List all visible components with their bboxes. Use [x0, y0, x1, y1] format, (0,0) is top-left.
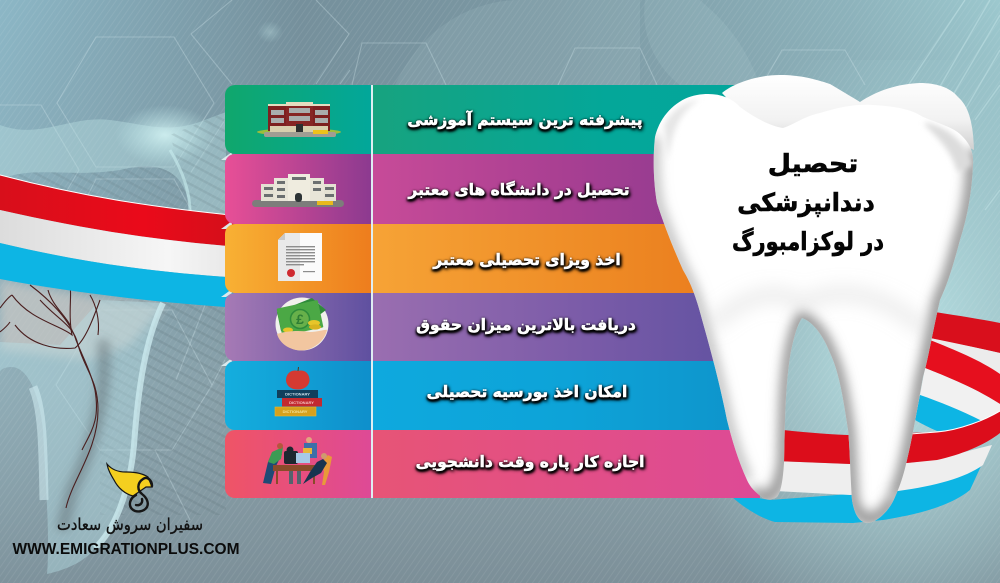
panel: reputable universities row [225, 154, 664, 224]
panel: student visa row [225, 224, 694, 293]
text: row 1 label: پیشرفته ترین سیستم آموزشی [407, 111, 643, 129]
small notch marks between rows [221, 152, 232, 366]
large translucent background curves [395, 0, 760, 85]
icon: apple on dictionaries [275, 367, 322, 416]
title on tooth: دندانپزشکی [737, 188, 875, 217]
text: row 5 label: امکان اخذ بورسیه تحصیلی [427, 383, 627, 401]
text: row 4 label: دریافت بالاترین میزان حقوق [416, 316, 636, 334]
right ribbon front band [725, 411, 1000, 523]
nerves [0, 285, 100, 508]
right ribbon back band [915, 312, 1000, 431]
text: website address: WWW.EMIGRATIONPLUS.COM [12, 541, 240, 558]
left ribbon [0, 175, 240, 308]
icon: students around a table [263, 437, 332, 485]
title on tooth: در لوکزامبورگ [732, 227, 884, 256]
soft outer shading, strongest on the right side and roots [654, 137, 747, 480]
pale glow beneath ribbon [0, 280, 165, 360]
hexagon outlines [0, 0, 865, 520]
tooth illustration [654, 75, 974, 523]
title on tooth [732, 149, 884, 256]
light streaks top right [905, 0, 1000, 210]
icon: golden wing [107, 464, 152, 496]
icon: white university building [252, 174, 344, 207]
tooth body [654, 94, 973, 523]
text: row 3 label: اخذ ویزای تحصیلی معتبر [433, 251, 621, 269]
icon: apple on dictionaries: DICTIONARY [285, 392, 310, 396]
title on tooth: تحصیل [768, 149, 858, 178]
panel: scholarship row [225, 361, 730, 430]
x-ray tooth root outline [0, 300, 163, 574]
panel: advanced education system row [225, 85, 735, 154]
panel: part-time work row [225, 430, 760, 498]
text: row 2 label: تحصیل در دانشگاه های معتبر [408, 181, 630, 199]
tooth back lobes [722, 75, 974, 150]
icon: red brick school [257, 102, 341, 137]
pale flowing wave on left [0, 21, 283, 215]
panel: highest salary row [225, 293, 714, 361]
text: row 6 label: اجازه کار پاره وقت دانشجویی [416, 453, 644, 471]
hatched panel lower left [100, 300, 226, 515]
icon: hand holding money [276, 298, 328, 350]
icon: document with seal [278, 233, 322, 281]
icon: hand holding money: £ [296, 311, 304, 327]
icon: apple on dictionaries: DICTIONARY [289, 400, 314, 405]
icon: swan neck and body [130, 478, 152, 511]
icon: apple on dictionaries: DICTIONARY [283, 409, 308, 414]
text: company name: سفیران سروش سعادت [57, 515, 203, 535]
